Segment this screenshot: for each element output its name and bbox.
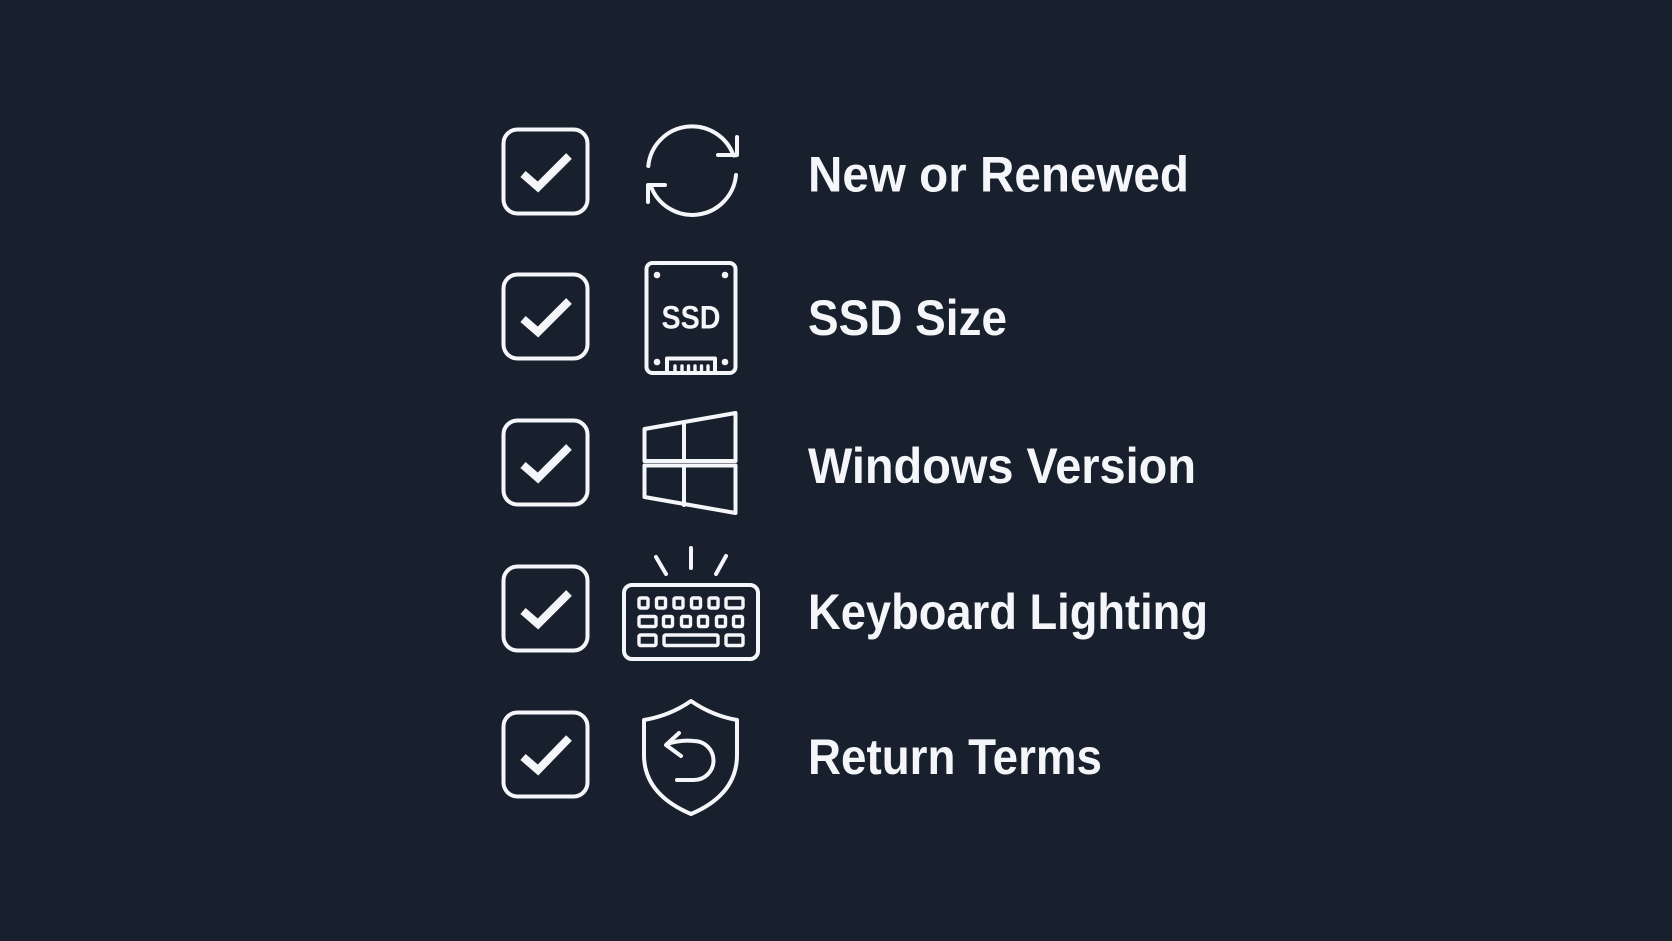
row: New or Renewed — [504, 126, 1189, 215]
icon: SSD drive — [646, 263, 736, 373]
label: Windows Version: Windows Version — [808, 438, 1196, 494]
checkbox 1 — [504, 130, 588, 214]
row: Windows Version — [504, 413, 1196, 513]
checkbox 4 — [504, 566, 588, 650]
label: Keyboard Lighting: Keyboard Lighting — [808, 584, 1208, 640]
checkbox 3 — [504, 420, 588, 504]
icon: return shield — [644, 701, 737, 814]
icon: backlit keyboard — [624, 548, 758, 659]
row: Keyboard Lighting — [504, 548, 1208, 659]
label: Return Terms: Return Terms — [808, 729, 1102, 785]
icon: Windows logo — [644, 413, 736, 513]
icon: renew arrows — [648, 126, 737, 215]
label: SSD Size: SSD Size — [808, 290, 1007, 346]
row: SSD Size — [504, 263, 1007, 373]
label: New or Renewed: New or Renewed — [808, 146, 1189, 202]
row: Return Terms — [504, 701, 1102, 814]
checkbox 2 — [504, 274, 588, 358]
icon: SSD drive: SSD — [662, 300, 720, 336]
checkbox 5 — [504, 712, 588, 796]
